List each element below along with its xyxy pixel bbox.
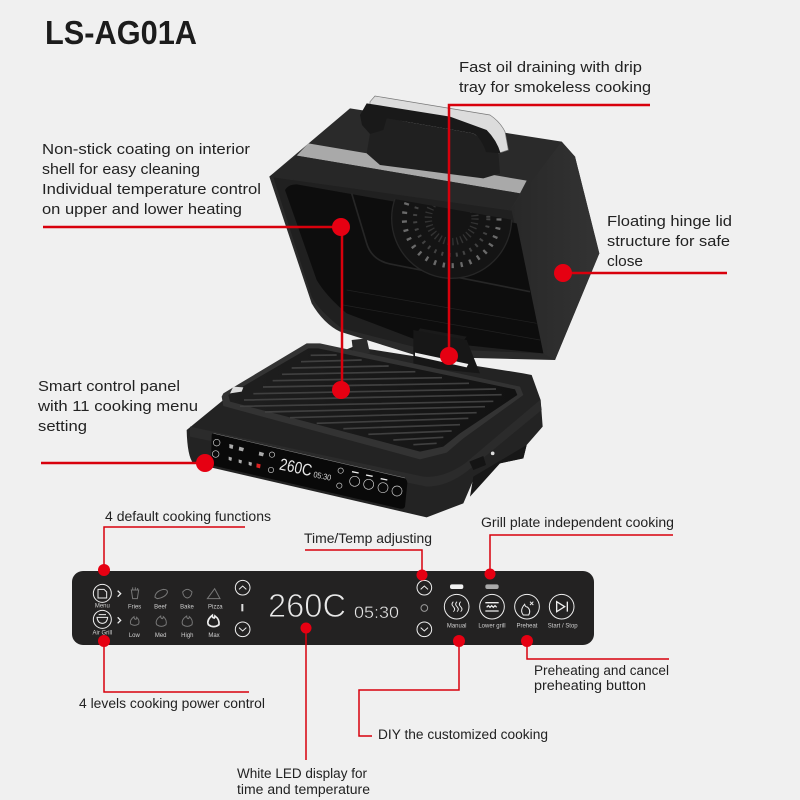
callout: floating hinge [554,213,732,282]
callout: preheating: Preheating and cancel [534,663,669,678]
left function icons: Med [155,633,166,639]
small control panel on base [211,433,407,509]
callout: LED display [237,622,370,797]
product: air fryer grill [187,96,599,517]
lid [269,108,599,360]
LED display readout: 05:30 [354,603,399,622]
callout: preheating: preheating button [534,678,646,693]
callout: smart control panel: setting [38,418,87,435]
small control panel on base: 05:30 [313,469,333,483]
right buttons: Lower grill [478,623,506,629]
left function icons: Max [208,633,220,639]
right buttons: Start / Stop [548,623,578,629]
callout: grill plate: Grill plate independent cooking [481,515,674,530]
left function icons: Low [129,633,140,639]
left function icons: Bake [180,604,194,610]
callout: power levels: 4 levels cooking power control [79,696,265,711]
callout: default functions: 4 default cooking functions [105,509,271,524]
callout: smart control panel [37,378,214,472]
base with grill plate [187,330,543,517]
callout: non-stick coating and temperature control: Non-stick coating on interior [42,141,250,158]
callout: LED display: time and temperature [237,782,370,797]
control panel [72,571,594,645]
small control panel on base: 260C [278,455,314,480]
title: LS-AG01A [45,14,197,51]
callout: oil draining: Fast oil draining with drip [459,59,642,76]
left function icons: Pizza [208,604,223,610]
callout: power levels [79,635,265,711]
LED display readout: 260C [268,587,346,624]
callout: LED display: White LED display for [237,766,367,781]
left function icons: Menu [95,603,110,609]
callout: non-stick coating and temperature control: Individual temperature control [42,181,261,198]
callout: smart control panel: Smart control panel [38,378,180,395]
callout: preheating [521,635,669,693]
handle [360,96,508,178]
callout: DIY: DIY the customized cooking [378,727,548,742]
left function icons: Fries [128,604,141,610]
left function icons: Beef [154,604,167,610]
callout: DIY [359,635,548,742]
callout: floating hinge: close [607,253,643,270]
right buttons: Manual [447,623,466,629]
callout: non-stick coating and temperature control: on upper and lower heating [42,201,242,218]
callout: floating hinge: Floating hinge lid [607,213,732,230]
callout: non-stick coating and temperature control: shell for easy cleaning [42,161,200,178]
callout: time and temp: Time/Temp adjusting [304,531,432,546]
callout: smart control panel: with 11 cooking menu [37,398,198,415]
callout: floating hinge: structure for safe [607,233,730,250]
callout: grill plate [481,515,674,580]
callout: time and temp [304,531,432,580]
fan grille [391,200,512,279]
callout: default functions [98,509,271,576]
left function icons: Air Grill [93,631,112,637]
callout: non-stick coating and temperature control [42,141,350,399]
right buttons [417,580,578,637]
left function icons: High [181,633,193,639]
LED display readout [268,587,399,624]
callout: oil draining [440,59,651,365]
left function icons [93,580,250,639]
callout: oil draining: tray for smokeless cooking [459,79,651,96]
right buttons: Preheat [517,623,538,629]
